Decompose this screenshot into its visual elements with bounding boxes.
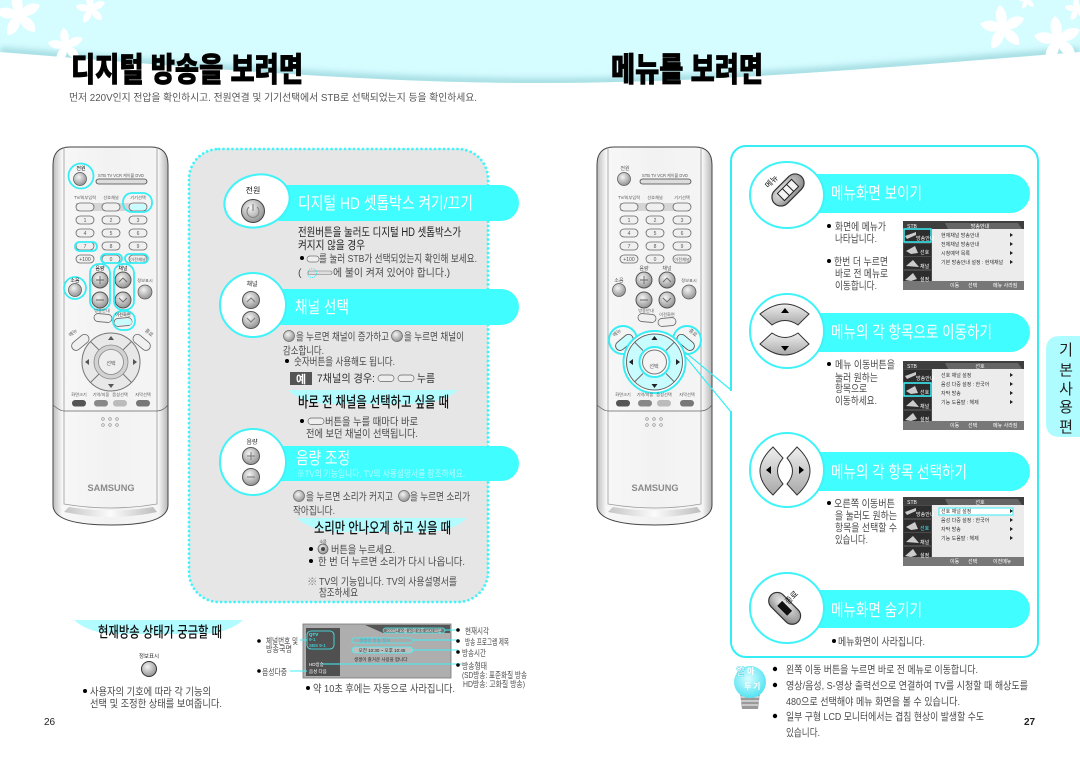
remote labels: 2 xyxy=(654,218,657,224)
menu screenshot 3: 기능 도움말 : 해제 xyxy=(941,535,979,542)
bar: show menu: 메뉴화면 보이기 xyxy=(831,184,922,203)
remote labels: 화면크기 xyxy=(71,391,87,398)
remote labels: 선호채널 xyxy=(647,194,663,201)
remote labels: 이전화면 xyxy=(659,311,675,318)
menu screenshot 2: 선호 xyxy=(920,389,930,396)
callouts: info screen labels: 음성다중 xyxy=(262,667,287,677)
remote labels: 1 xyxy=(84,218,87,224)
menu screenshot 1 xyxy=(903,221,1024,290)
menu screenshot 1: 방송안내 xyxy=(916,235,935,242)
remote labels: 전원 xyxy=(76,165,86,172)
text: select item xyxy=(827,498,897,546)
remote labels: 기억/지움 xyxy=(93,391,109,398)
menu screenshot 1: 선택 xyxy=(968,282,978,289)
text: show menu: 바로 전 메뉴로 xyxy=(835,268,888,280)
remote labels: 자막선택 xyxy=(679,391,695,398)
text: show menu: 한번 더 누르면 xyxy=(834,256,888,268)
remote labels: 화면크기 xyxy=(615,391,631,398)
remote labels: 9 xyxy=(681,244,684,250)
text: mute help: 참조하세요 xyxy=(319,586,358,599)
bar: hide menu: 메뉴화면 숨기기 xyxy=(831,601,922,620)
info screen diagram: 오전 10:30 ~ 오후 10:45 xyxy=(359,647,406,654)
text: show menu: 나타납니다. xyxy=(835,233,877,245)
remote labels: SAMSUNG xyxy=(632,483,678,493)
text: select item: 을 눌러도 원하는 xyxy=(835,509,897,522)
menu screenshot 2: 선호 채널 설정 xyxy=(941,372,971,379)
info screen diagram xyxy=(290,624,462,678)
bar: channel select xyxy=(262,289,519,325)
menu screenshot 2: 자막 방송 xyxy=(941,390,961,397)
note: ten seconds: 약 10초 후에는 자동으로 사라집니다. xyxy=(313,683,455,695)
icon: channel buttons: 채널 xyxy=(246,280,258,288)
text: select item: 항목을 선택할 수 xyxy=(835,522,897,534)
text: show menu: 이동합니다. xyxy=(835,280,877,292)
page number 26: 26 xyxy=(44,717,56,728)
title: menu: 메뉴를 보려면 xyxy=(611,51,763,88)
icon: light bulb tip xyxy=(734,665,766,709)
text: power help: 전원버튼을 눌러도 디지털 HD 셋톱박스가 xyxy=(298,225,461,239)
text: show menu xyxy=(827,221,888,292)
info screen diagram: 2005년 10월 10일 오후 10시 30분 xyxy=(386,628,442,633)
text: move items: 눌러 원하는 xyxy=(835,371,878,384)
example: channel 7: 누름 xyxy=(417,372,435,385)
title: digital broadcast: 디지털 방송을 보려면 xyxy=(71,51,303,88)
icon: light bulb tip: 두 xyxy=(744,682,752,691)
panel: digital broadcast steps xyxy=(189,149,519,602)
menu screenshot 1: 채널 xyxy=(920,263,930,270)
menu screenshot 3: 자막 방송 xyxy=(941,526,961,533)
remote labels: 선택 xyxy=(106,360,116,367)
icon: channel buttons xyxy=(220,273,286,337)
menu screenshot 3: 선호 채널 설정 xyxy=(941,508,971,515)
callouts: info screen labels: 방송시간 xyxy=(462,648,486,658)
callouts: info screen labels: 현재시각 xyxy=(465,626,489,636)
remote labels: +100 xyxy=(623,257,635,263)
menu screenshot 2: 기능 도움말 : 해제 xyxy=(941,399,979,406)
menu screenshot 2: 채널 xyxy=(920,403,930,410)
tips text: 480으로 선택해야 메뉴 화면을 볼 수 있습니다. xyxy=(786,695,960,708)
page number 27: 27 xyxy=(1024,717,1036,728)
menu screenshot 2 xyxy=(903,361,1024,430)
text: previous channel help xyxy=(300,416,418,440)
remote labels xyxy=(67,165,154,493)
remote labels: 메뉴 xyxy=(611,327,623,338)
tips text: 있습니다. xyxy=(786,727,820,739)
text: hide menu: 메뉴화면이 사라집니다. xyxy=(838,636,925,648)
remote labels: 이전채널 xyxy=(130,256,146,263)
remote labels: 1 xyxy=(628,218,631,224)
icon: volume buttons: 음량 xyxy=(246,439,258,446)
remote labels: 기억/지움 xyxy=(637,391,653,398)
subheading: current status: 현재방송 상태가 궁금할 때 xyxy=(98,624,222,641)
text: move items: 메뉴 이동버튼을 xyxy=(835,359,895,371)
text: status description: 사용자의 기호에 따라 각 기능의 xyxy=(90,686,211,698)
remote labels: 8 xyxy=(110,244,113,250)
section: current status xyxy=(74,620,243,710)
remote labels: 4 xyxy=(84,231,87,237)
text: select item: 오른쪽 이동버튼 xyxy=(834,498,895,510)
callouts: info screen labels xyxy=(257,626,527,689)
text: volume help: 작아집니다. xyxy=(293,505,335,517)
icon: exit button xyxy=(750,573,824,643)
callouts: info screen labels: HD방송: 고화질 방송) xyxy=(463,679,525,689)
menu screenshot 3: STB xyxy=(907,500,918,506)
remote labels: 채널 xyxy=(662,265,672,272)
remote labels: 방송안내 xyxy=(94,307,110,314)
menu screenshot 3: 선택 xyxy=(968,558,978,565)
remote labels: 6 xyxy=(681,231,684,237)
menu screenshot 2: 이동 xyxy=(950,422,960,429)
bar: move between items: 메뉴의 각 항목으로 이동하기 xyxy=(831,323,992,342)
tips text: 왼쪽 이동 버튼을 누르면 바로 전 메뉴로 이동합니다. xyxy=(786,664,978,676)
remote labels: 기기선택 xyxy=(674,194,690,201)
menu screenshot 2: 메뉴 사라짐 xyxy=(993,422,1017,429)
text: channel help: 을 누르면 채널이 증가하고 xyxy=(296,330,389,343)
menu screenshot 2: 선호 xyxy=(975,363,985,370)
info screen diagram: 생생한 방송 정보 xyxy=(359,637,390,643)
bar: volume: ※TV의 기능입니다. TV의 사용설명서를 참조하세요. xyxy=(297,468,465,480)
panel: menu steps xyxy=(685,146,1038,657)
text: previous channel help: 버튼을 누를 때마다 바로 xyxy=(325,416,418,428)
remote highlights xyxy=(64,164,152,330)
callouts: info screen labels: 방송 프로그램 제목 xyxy=(465,637,509,647)
remote labels: STB TV VCR 케이블 DVD xyxy=(642,172,688,179)
text: power help: 에 불이 켜져 있어야 합니다.) xyxy=(333,266,450,279)
text: power help: 를 눌러 STB가 선택되었는지 확인해 보세요. xyxy=(319,252,477,265)
icon: power button xyxy=(218,167,296,235)
menu screenshot 1: STB xyxy=(907,224,918,230)
remote labels: 선택 xyxy=(649,363,659,370)
tips text: 영상/음성, S-영상 출력선으로 연결하여 TV를 시청할 때 해상도를 xyxy=(786,679,1028,692)
remote labels: 9 xyxy=(137,244,140,250)
remote labels: 정보표시 xyxy=(681,277,697,283)
text: channel help: 감소합니다. xyxy=(283,345,324,357)
info screen diagram: QTV xyxy=(309,632,318,637)
menu screenshot 1: 전체채널 방송안내 xyxy=(941,241,980,248)
example: channel 7: 7채널의 경우: xyxy=(317,372,375,385)
menu screenshot 2: 방송안내 xyxy=(916,375,935,382)
text: mute help: 한 번 더 누르면 소리가 다시 나옵니다. xyxy=(318,556,465,568)
text: move items: 항목으로 xyxy=(835,383,867,395)
icon: menu button: 메뉴 xyxy=(763,173,780,190)
icon: light bulb tip: 알 xyxy=(736,665,745,678)
icon: light bulb tip: 기 xyxy=(753,681,760,691)
tips text xyxy=(773,664,1028,739)
remote labels: 0 xyxy=(654,257,657,263)
menu screenshot 3: 설정 xyxy=(920,552,929,559)
side tab: basic use: 본 xyxy=(1059,362,1073,379)
bar: volume xyxy=(262,446,519,481)
subheading: mute: 소리만 안나오게 하고 싶을 때 xyxy=(314,520,451,537)
menu screenshot 2: 음성 다중 설정 : 한국어 xyxy=(941,381,989,388)
text: channel help: 을 누르면 채널이 xyxy=(404,331,464,343)
remote labels: 7 xyxy=(628,244,631,250)
subheading: previous channel: 바로 전 채널을 선택하고 싶을 때 xyxy=(298,394,449,411)
info screen diagram: 9-1 xyxy=(309,637,316,642)
remote labels: TV/외부입력 xyxy=(74,194,96,201)
remote labels: 방송안내 xyxy=(638,307,654,314)
text: channel help xyxy=(283,330,464,368)
menu screenshot 3: 이전메뉴 xyxy=(993,558,1012,565)
text: power help: 켜지지 않을 경우 xyxy=(298,238,365,252)
tips text: 일부 구형 LCD 모니터에서는 겹침 현상이 발생할 수도 xyxy=(786,710,984,723)
text: mute help: 소음 xyxy=(319,539,327,544)
icon: info button xyxy=(139,653,159,676)
remote labels: 3 xyxy=(681,218,684,224)
bar: select item xyxy=(790,452,1030,491)
icon: exit button: 종료 xyxy=(783,589,800,606)
callouts: info screen labels: (SD방송: 표준화질 방송 xyxy=(462,670,527,680)
remote labels: 0 xyxy=(110,257,113,263)
remote labels: 이전채널 xyxy=(674,256,690,263)
menu screenshot 2: STB xyxy=(907,364,918,370)
text: previous channel help: 전에 보던 채널이 선택됩니다. xyxy=(306,427,418,440)
icon: up and down arrows xyxy=(750,294,824,368)
menu screenshot 3: 음성 다중 설정 : 한국어 xyxy=(941,517,989,524)
info screen diagram: 음성 다음 xyxy=(309,668,327,675)
text: volume help xyxy=(293,490,470,517)
subheading: previous channel xyxy=(288,390,458,411)
remote labels: 종료 xyxy=(143,328,154,339)
text: status description: 선택 및 조정한 상태를 보여줍니다. xyxy=(90,698,222,710)
menu screenshot 2: 선택 xyxy=(968,422,978,429)
menu screenshot 3: 방송안내 xyxy=(916,511,935,518)
info screen diagram: 생생이 즐거운 사용을 합니다 xyxy=(354,656,408,663)
callouts: info screen labels: 체널번호 및 xyxy=(266,636,298,646)
icon: info button: 정보표시 xyxy=(139,653,159,660)
remote labels: 메뉴 xyxy=(67,327,79,338)
remote labels: SAMSUNG xyxy=(88,483,134,493)
menu screenshot 3: 이동 xyxy=(950,558,960,565)
menu screenshot 1: 설정 xyxy=(920,276,929,283)
info screen diagram: SBS 9-1 xyxy=(309,643,326,648)
left remote control xyxy=(53,147,168,525)
arrow: remote to panel xyxy=(685,352,733,412)
remote labels: 음량 xyxy=(95,265,105,272)
text: volume help: 을 누르면 소리가 커지고 xyxy=(306,491,393,503)
side tab: basic use: 편 xyxy=(1059,419,1073,436)
text: mute help: ※ xyxy=(307,576,318,588)
remote labels: 음성선택 xyxy=(112,391,128,398)
bar: channel select: 채널 선택 xyxy=(295,298,349,317)
side tab: basic use xyxy=(1046,336,1080,437)
remote labels: 음량 xyxy=(639,265,649,272)
remote labels: 5 xyxy=(110,231,113,237)
callouts: info screen labels: 방송국명 xyxy=(266,644,292,654)
remote labels: 정보표시 xyxy=(137,277,153,283)
icon: menu button xyxy=(750,162,824,228)
bar: power: 디지털 HD 셋톱박스 켜기/끄기 xyxy=(298,194,473,213)
bar: show menu xyxy=(790,174,1030,213)
icon: volume buttons xyxy=(220,429,286,495)
subheading: current status xyxy=(74,620,243,641)
menu screenshot 1: 메뉴 사라짐 xyxy=(993,282,1017,289)
menu screenshot 1: 기본 방송안내 설정 : 현재채널 xyxy=(941,259,1004,266)
remote labels: 8 xyxy=(654,244,657,250)
text: show menu: 화면에 메뉴가 xyxy=(835,221,886,233)
side tab: basic use: 용 xyxy=(1059,399,1073,416)
menu screenshot 1: 이동 xyxy=(950,282,960,289)
remote labels: 3 xyxy=(137,218,140,224)
text: mute help: TV의 기능입니다. TV의 사용설명서를 xyxy=(319,575,457,588)
side tab: basic use: 기 xyxy=(1059,342,1073,359)
remote labels: +100 xyxy=(79,257,91,263)
example: channel 7: 예 xyxy=(296,373,306,386)
intro text: 먼저 220V인지 전압을 확인하시고. 전원연결 및 기기선택에서 STB로 선택되었는지 등을 확인하세요. xyxy=(69,91,477,104)
bar: volume: 음량 조정 xyxy=(296,449,350,468)
menu screenshot 2: 설정 xyxy=(920,416,929,423)
remote labels: 5 xyxy=(654,231,657,237)
menu screenshot 3 xyxy=(903,497,1024,566)
icon: power button: 전원 xyxy=(246,185,260,195)
remote labels: 이전화면 xyxy=(115,311,131,318)
remote labels: 전원 xyxy=(620,165,630,172)
text: power help xyxy=(298,225,477,279)
remote labels xyxy=(611,165,698,493)
remote labels: 선호채널 xyxy=(103,194,119,201)
callouts: info screen labels: 방송형태 xyxy=(462,661,487,671)
menu screenshot 1: 현재채널 방송안내 xyxy=(941,232,980,239)
remote highlights: menu and navigation xyxy=(609,326,701,393)
header background wave xyxy=(0,0,1080,83)
info screen diagram: HD방송 xyxy=(309,661,324,667)
remote labels: 소음 xyxy=(614,278,624,284)
bar: power xyxy=(262,185,519,221)
menu screenshot 1: 방송안내 xyxy=(971,223,990,230)
text: status description xyxy=(83,686,222,710)
remote labels: 7 xyxy=(84,244,87,250)
remote labels: 종료 xyxy=(687,328,698,339)
remote labels: 2 xyxy=(110,218,113,224)
subheading: mute xyxy=(297,518,467,537)
menu screenshot 1: 선호 xyxy=(920,249,930,256)
right remote control xyxy=(597,147,712,525)
remote labels: 채널 xyxy=(118,265,128,272)
bar: select item: 메뉴의 각 항목 선택하기 xyxy=(831,463,967,482)
example: channel 7 xyxy=(290,372,435,386)
remote labels: 6 xyxy=(137,231,140,237)
remote labels: 자막선택 xyxy=(135,391,151,398)
icon: left and right arrows xyxy=(750,433,824,507)
text: mute help xyxy=(307,539,465,599)
bar: move between items xyxy=(790,313,1030,352)
text: select item: 있습니다. xyxy=(835,534,868,546)
menu screenshot 1: 시청예약 목록 xyxy=(941,250,970,257)
remote labels: 소음 xyxy=(70,278,80,284)
remote labels: 음성선택 xyxy=(656,391,672,398)
text: move items xyxy=(827,359,895,407)
text: power help: ( xyxy=(298,267,302,279)
menu screenshot 3: 채널 xyxy=(920,539,930,546)
menu screenshot 3: 선호 xyxy=(920,525,930,532)
text: move items: 이동하세요. xyxy=(835,394,877,407)
text: channel help: 숫자버튼을 사용해도 됩니다. xyxy=(294,355,395,368)
icon: light bulb tip: 아 xyxy=(747,666,755,676)
text: mute help: 버튼을 누르세요. xyxy=(331,544,395,556)
bar: hide menu xyxy=(790,590,1030,628)
menu screenshot 3: 선호 xyxy=(975,499,985,506)
remote labels: 4 xyxy=(628,231,631,237)
remote labels: STB TV VCR 케이블 DVD xyxy=(98,172,144,179)
side tab: basic use: 사 xyxy=(1059,381,1073,398)
text: volume help: 을 누르면 소리가 xyxy=(410,491,470,503)
remote labels: TV/외부입력 xyxy=(618,194,640,201)
remote labels: 기기선택 xyxy=(130,194,146,201)
